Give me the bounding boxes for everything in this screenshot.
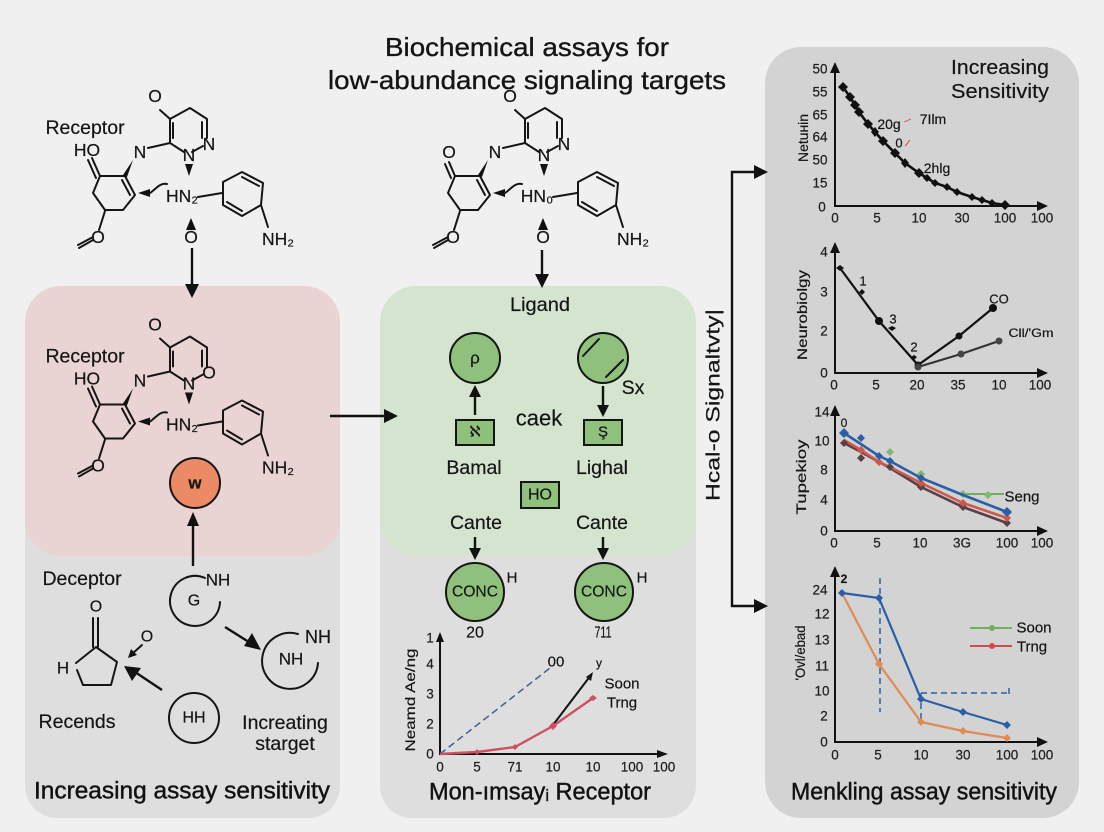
arrow: slashed circle to box	[597, 386, 609, 417]
chart: bottom blue and orange lines: 0	[820, 734, 828, 750]
chart: V-shaped neurobiology	[794, 242, 1054, 392]
panel: left assay sensitivity	[25, 300, 340, 818]
heading: Increasing Sensitivity	[951, 57, 1049, 103]
title: Biochemical assays for	[385, 32, 669, 62]
chart: multi-series decline: 100	[996, 536, 1018, 550]
chart: top decay curve: 0	[895, 136, 903, 150]
arrow: middle molecule to ligand panel	[535, 218, 550, 288]
chart: V-shaped neurobiology: 10	[991, 378, 1007, 392]
chart: multi-series decline: 3G	[953, 536, 971, 550]
icon: CONC left: H	[507, 570, 517, 586]
chart: multi-series decline: 0	[830, 536, 838, 550]
molecule: top left receptor	[45, 86, 294, 249]
chart: middle panel line chart: 4	[426, 656, 434, 672]
arrow: up to w node	[187, 512, 199, 566]
chart: middle panel line chart: 100	[621, 760, 643, 774]
label: Ligand: Ligand	[510, 294, 570, 316]
molecule: middle top: N	[558, 134, 570, 154]
label: Increating starget	[242, 712, 328, 755]
chart: middle panel line chart: 2	[426, 716, 434, 732]
molecule: middle top: O	[503, 86, 517, 106]
molecule: top left receptor: NH₂	[262, 229, 294, 249]
chart: bottom blue and orange lines: 12	[814, 606, 830, 622]
icon: G node: NH	[206, 570, 230, 590]
molecule: middle top: N	[489, 142, 501, 162]
arrow: G to NH	[225, 627, 261, 650]
icon: p circle	[450, 333, 500, 383]
panel: middle receptor assay	[380, 300, 696, 818]
title	[328, 32, 726, 95]
icon: NH node: NH	[305, 627, 331, 647]
chart: bottom blue and orange lines: 2	[820, 708, 828, 724]
molecule: receptor in pink panel: Receptor	[45, 346, 125, 368]
chart: top decay curve: Netuнin	[795, 114, 811, 162]
molecule: receptor in pink panel	[45, 314, 294, 478]
label: Increating starget: Increating	[242, 712, 328, 734]
chart: V-shaped neurobiology: 0	[820, 366, 828, 380]
box: HO	[521, 482, 559, 508]
chart: multi-series decline: 10	[912, 536, 928, 550]
chart: multi-series decline	[793, 404, 1053, 550]
chart: bottom blue and orange lines: 13	[814, 632, 830, 648]
chart: bottom blue and orange lines: 5	[874, 748, 882, 762]
icon: NH node: NH	[279, 650, 303, 668]
heading: right panel footer: Menkling assay sensitivity	[791, 778, 1057, 806]
title: low-abundance signaling targets	[328, 65, 726, 95]
chart: bottom blue and orange lines: 0	[831, 748, 839, 762]
icon: orange w node	[170, 458, 220, 508]
chart: V-shaped neurobiology: Cll/'Gm	[1008, 326, 1054, 340]
chart: middle panel line chart: 0	[426, 746, 434, 762]
arrow: pink panel to green panel	[330, 409, 398, 423]
molecule: receptor in pink panel: O	[148, 314, 162, 334]
molecule: top left receptor: HN₂	[166, 186, 198, 206]
heading: Increasing Sensitivity: Sensitivity	[951, 81, 1049, 103]
chart: top decay curve: 20g	[877, 116, 901, 132]
molecule: receptor in pink panel: N	[183, 374, 195, 394]
chart: top decay curve: 30	[954, 210, 970, 226]
molecule: pentagon ketone: O	[141, 628, 153, 646]
chart: top decay curve: 15	[812, 176, 828, 190]
icon: CONC right: H	[637, 570, 647, 586]
chart: V-shaped neurobiology: Neurobiolgy	[794, 270, 810, 360]
label: Deceptor: Deceptor	[42, 568, 122, 590]
chart: top decay curve: 100	[994, 210, 1016, 226]
chart: middle panel line chart: 71	[507, 760, 523, 774]
box: N: ℵ	[469, 424, 481, 440]
chart: middle panel line chart: 10	[585, 760, 601, 774]
icon: HH node: HH	[182, 710, 206, 726]
label: Bamal: Bamal	[446, 457, 502, 479]
label: Cante left: Cante	[450, 512, 502, 534]
chart: bottom blue and orange lines: Soon	[1016, 620, 1052, 636]
chart: top decay curve: 50	[812, 152, 828, 168]
molecule: top left receptor: O	[91, 227, 105, 247]
panel: ligand green	[380, 286, 696, 556]
box: N	[456, 420, 494, 445]
molecule: top left receptor: O	[148, 86, 162, 106]
heading: middle panel footer: Mon-ımsayᵢ Receptor	[429, 778, 651, 806]
arrow: bracket to right panel charts	[732, 165, 768, 613]
chart: bottom blue and orange lines	[792, 566, 1053, 762]
chart: bottom blue and orange lines: 'Ovl/ebad	[792, 626, 808, 680]
chart: V-shaped neurobiology: 100	[1029, 378, 1051, 392]
arrow: HH to pentagon	[124, 666, 162, 690]
molecule: top left receptor: N	[203, 134, 215, 154]
chart: middle panel line chart: y	[596, 656, 602, 670]
chart: top decay curve: 7Ilm	[920, 111, 946, 127]
heading: left panel footer: Increasing assay sensitivity	[34, 778, 330, 804]
label: vertical axis text: Hcal-o Signaltvty|	[704, 309, 724, 501]
chart: multi-series decline: 0	[820, 524, 828, 538]
molecule: pentagon ketone: H	[57, 658, 69, 678]
chart: middle panel line chart: Soon	[604, 676, 640, 692]
icon: CONC right: 711	[594, 624, 612, 642]
chart: middle panel line chart: 0	[436, 760, 444, 774]
icon: slashed circle	[578, 333, 628, 383]
chart: multi-series decline: 0	[841, 416, 848, 430]
molecule: receptor in pink panel: O	[91, 456, 105, 476]
chart: V-shaped neurobiology: 2	[820, 324, 828, 338]
box: S	[584, 420, 622, 445]
panel: right charts	[765, 47, 1079, 818]
icon: CONC right: CONC	[581, 584, 627, 600]
icon: CONC left: 20	[466, 624, 484, 642]
molecule: receptor in pink panel: HO	[74, 368, 100, 388]
label: Lighal: Lighal	[576, 457, 628, 479]
chart: bottom blue and orange lines: 24	[812, 582, 828, 598]
chart: top decay curve: 65	[812, 108, 828, 122]
molecule: middle top: O	[442, 142, 456, 162]
chart: top decay curve: 2hlg	[924, 160, 950, 176]
arrow: box to p circle	[469, 385, 481, 415]
label: Increating starget: starget	[255, 733, 315, 755]
molecule: middle top	[433, 86, 649, 249]
box: HO: HO	[528, 486, 552, 504]
molecule: top left receptor: HO	[74, 140, 100, 160]
icon: CONC right	[575, 563, 647, 642]
label: Recends: Recends	[39, 711, 116, 733]
molecule: receptor in pink panel: N	[134, 370, 146, 390]
arrow: middle molecule to ligand panel: O	[536, 227, 550, 247]
molecule: pentagon ketone: O	[90, 598, 102, 616]
chart: bottom blue and orange lines: 10	[913, 748, 929, 762]
chart: V-shaped neurobiology: 4	[820, 244, 828, 260]
molecule: receptor in pink panel: NH₂	[262, 458, 294, 478]
icon: HH node	[169, 693, 219, 743]
molecule: receptor in pink panel: HN₂	[166, 414, 198, 434]
chart: top decay curve: 100	[1031, 210, 1053, 226]
label: caek: caek	[516, 406, 563, 430]
chart: bottom blue and orange lines: 10	[814, 684, 830, 698]
chart: V-shaped neurobiology: 20	[909, 378, 925, 392]
chart: middle panel line chart: 1	[426, 630, 434, 646]
arrow: Cante to CONC right	[597, 537, 609, 560]
chart: multi-series decline: 8	[820, 462, 828, 478]
icon: CONC left	[446, 563, 517, 642]
chart: V-shaped neurobiology: 0	[830, 378, 838, 392]
chart: multi-series decline: 10	[814, 434, 830, 448]
chart: top decay curve: 0	[831, 210, 839, 226]
chart: top decay curve	[795, 62, 1053, 226]
chart: multi-series decline: 5	[873, 536, 881, 550]
chart: bottom blue and orange lines: 30	[955, 748, 971, 762]
chart: bottom blue and orange lines: 2	[841, 572, 848, 586]
chart: bottom blue and orange lines: 11	[815, 658, 829, 674]
panel: receptor pink	[25, 286, 340, 556]
molecule: top left receptor: Receptor	[45, 117, 125, 139]
chart: middle panel line chart: 5	[473, 760, 481, 774]
chart: middle panel line chart: 10	[545, 760, 561, 774]
chart: multi-series decline: 100	[1031, 536, 1053, 550]
molecule: pentagon ketone	[57, 598, 153, 685]
box: S: Ş	[598, 424, 608, 440]
arrow: double arrow top left molecule to receptor panel: O	[184, 227, 198, 247]
arrow: double arrow top left molecule to receptor panel	[184, 218, 199, 298]
label: Cante right: Cante	[576, 512, 628, 534]
chart: middle panel line chart: Neamd Ae/ng	[402, 648, 418, 752]
chart: top decay curve: 55	[812, 84, 828, 100]
arrow: Cante to CONC left	[469, 537, 481, 560]
chart: top decay curve: 50	[812, 62, 828, 76]
chart: middle panel line chart: 00	[548, 654, 564, 670]
molecule: middle top: O	[446, 227, 460, 247]
molecule: top left receptor: N	[134, 142, 146, 162]
chart: multi-series decline: Tupekioy	[793, 440, 809, 514]
chart: bottom blue and orange lines: 100	[1031, 748, 1053, 762]
chart: V-shaped neurobiology: 3	[820, 284, 828, 300]
chart: middle panel line chart: 100	[653, 760, 675, 774]
chart: V-shaped neurobiology: 2	[910, 340, 918, 354]
molecule: receptor in pink panel: O	[202, 362, 216, 382]
chart: V-shaped neurobiology: 3	[889, 312, 897, 326]
chart: V-shaped neurobiology: 1	[859, 274, 867, 288]
molecule: top left receptor: N	[183, 145, 195, 165]
chart: top decay curve: 0	[818, 200, 826, 214]
chart: middle panel line chart: Trng	[607, 694, 637, 712]
chart: V-shaped neurobiology: CO	[989, 292, 1009, 306]
molecule: middle top: NH₂	[617, 229, 649, 249]
chart: top decay curve: 5	[873, 210, 881, 226]
chart: multi-series decline: Seng	[1004, 488, 1040, 506]
chart: top decay curve: 10	[911, 210, 927, 226]
chart: bottom blue and orange lines: 100	[996, 748, 1018, 762]
icon: NH node	[262, 627, 331, 689]
icon: G node	[170, 570, 230, 626]
icon: G node: G	[188, 592, 200, 610]
chart: middle panel line chart	[402, 630, 675, 774]
chart: V-shaped neurobiology: 5	[872, 378, 880, 392]
icon: orange w node: w	[187, 474, 202, 492]
label: Sx: Sx	[622, 377, 645, 399]
chart: V-shaped neurobiology: 35	[950, 378, 966, 392]
chart: top decay curve: 64	[812, 130, 828, 144]
molecule: middle top: HN₀	[521, 186, 553, 206]
chart: middle panel line chart: 3	[426, 686, 434, 702]
molecule: middle top: N	[538, 145, 550, 165]
heading: Increasing Sensitivity: Increasing	[951, 57, 1049, 79]
chart: bottom blue and orange lines: Trng	[1017, 638, 1047, 656]
chart: multi-series decline: 14	[814, 404, 830, 420]
icon: CONC left: CONC	[452, 584, 498, 600]
icon: p circle: ρ	[470, 348, 480, 368]
chart: multi-series decline: 4	[820, 492, 828, 508]
